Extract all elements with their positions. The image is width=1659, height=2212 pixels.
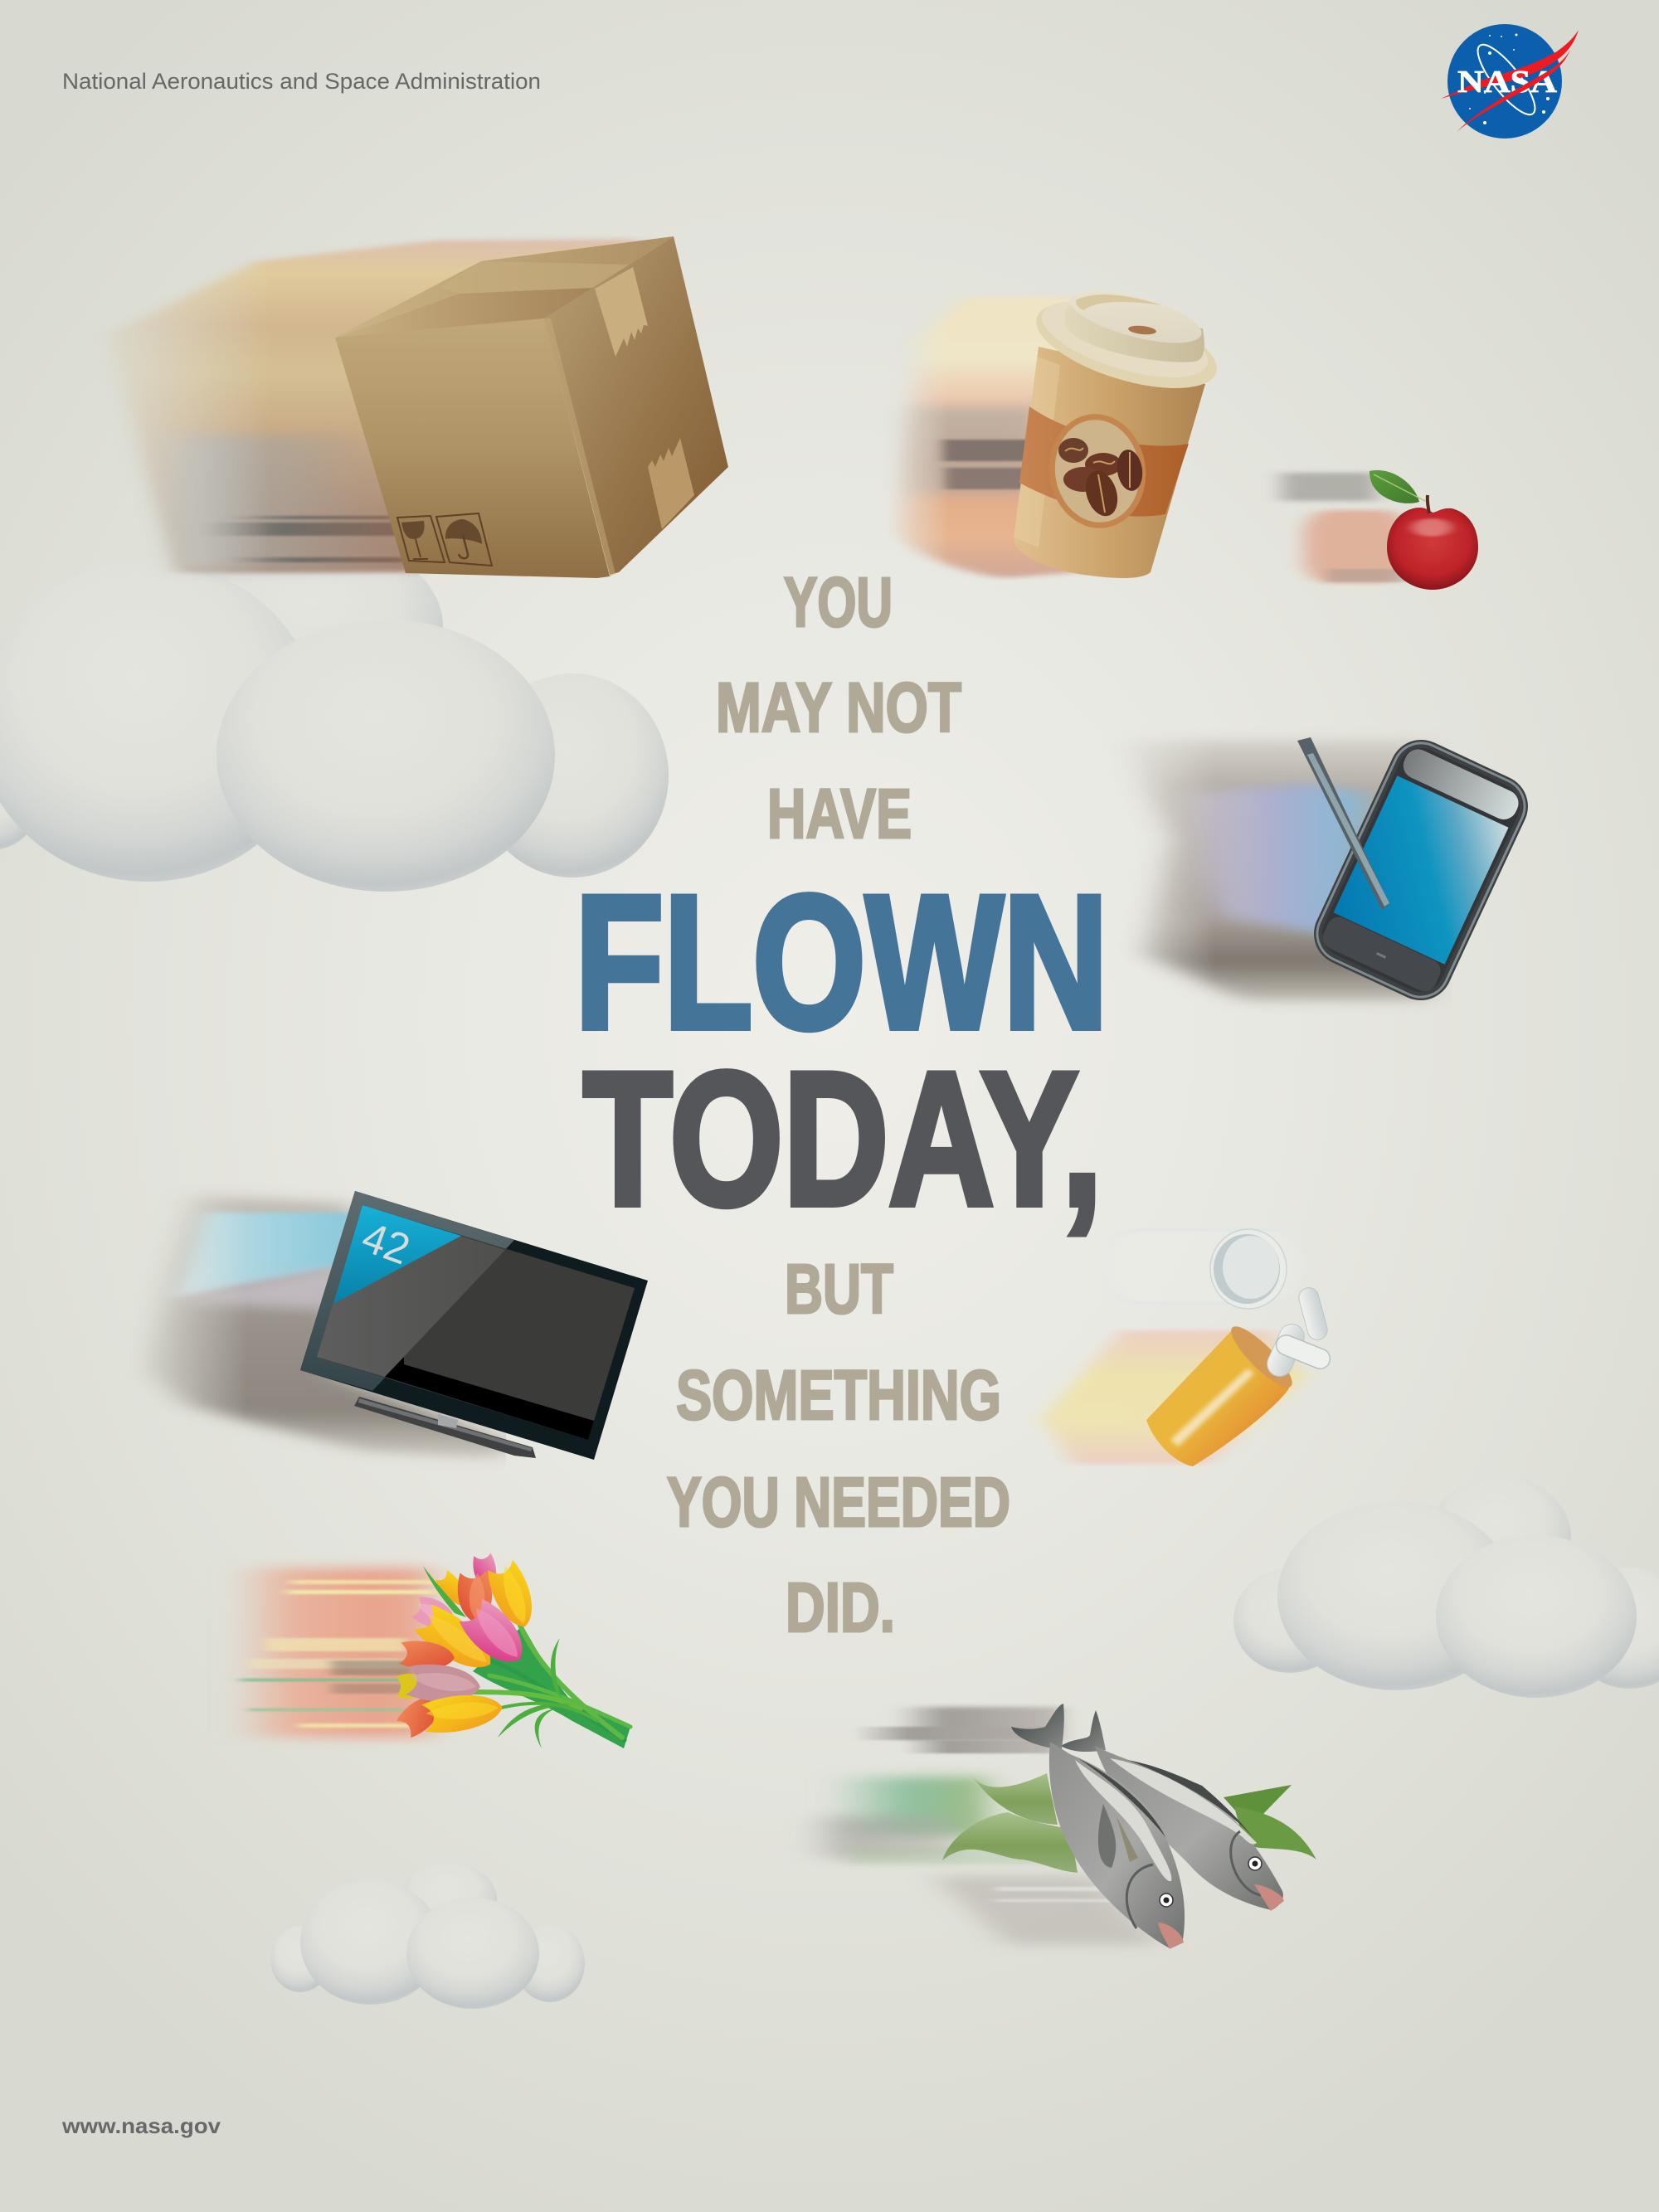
cup sleeve band xyxy=(1019,406,1189,517)
line: TODAY,: TODAY, xyxy=(583,1033,1102,1245)
NASA logo red lower streak xyxy=(1457,50,1570,132)
NASA logo red vector band xyxy=(1441,30,1579,99)
fish motion trail xyxy=(805,1707,1161,1945)
apple xyxy=(1387,508,1478,590)
line: FLOWN: FLOWN xyxy=(575,856,1108,1068)
tulip flowers xyxy=(394,1553,542,1740)
cup coffee-bean label xyxy=(1042,408,1153,534)
box tape xyxy=(595,267,648,357)
tulip bouquet with motion trail xyxy=(232,1553,630,1748)
box motion trail xyxy=(104,239,639,572)
bottle cap xyxy=(1210,1229,1287,1309)
line: SOMETHING: SOMETHING xyxy=(676,1356,1001,1434)
phone motion trail xyxy=(1116,740,1427,1001)
cloud: right xyxy=(1233,1476,1659,1698)
fish leaves xyxy=(942,1773,1316,1873)
box faces xyxy=(335,236,674,338)
cup motion trail xyxy=(892,297,1078,578)
phone stylus xyxy=(1297,737,1389,910)
line: DID.: DID. xyxy=(786,1568,895,1646)
footer: website: www.nasa.gov xyxy=(61,2113,221,2138)
tv channel number: 42 xyxy=(356,1213,416,1274)
fish on leaves with motion trail xyxy=(805,1704,1316,1949)
cap motion trail xyxy=(1106,1230,1301,1303)
coffee cup with motion trail xyxy=(892,280,1226,578)
bottle xyxy=(1146,1329,1290,1466)
tv motion trail xyxy=(137,1194,514,1460)
apple with motion trail xyxy=(1282,470,1478,590)
cloud: large upper left xyxy=(0,539,669,892)
tv screen xyxy=(317,1205,635,1440)
apple leaf xyxy=(1370,470,1419,503)
line: BUT: BUT xyxy=(785,1250,893,1328)
television with motion trail xyxy=(137,1191,648,1460)
pill bottle with motion trail xyxy=(1041,1229,1333,1466)
line: YOU: YOU xyxy=(784,563,893,641)
smartphone with motion trail xyxy=(1116,729,1538,1011)
tulip motion trail xyxy=(232,1568,440,1738)
bottle motion trail xyxy=(1041,1330,1306,1464)
fish: rear xyxy=(1061,1710,1284,1911)
phone body xyxy=(1304,729,1538,1011)
headline: you may not have flown today, but something you needed did. xyxy=(575,563,1108,1646)
apple motion trail xyxy=(1282,473,1408,583)
cloud: lower left xyxy=(270,1863,585,2009)
cup lid xyxy=(1027,280,1226,406)
line: YOU NEEDED: YOU NEEDED xyxy=(667,1463,1010,1541)
NASA logo xyxy=(1441,24,1579,139)
line: MAY NOT: MAY NOT xyxy=(716,668,961,746)
cup body xyxy=(1014,347,1205,578)
line: HAVE: HAVE xyxy=(767,775,912,853)
loose pills xyxy=(1263,1286,1333,1380)
box handling icons xyxy=(397,513,492,566)
tv frame xyxy=(300,1191,648,1460)
header: agency name: National Aeronautics and Space Administration xyxy=(62,69,541,94)
tulip leaves xyxy=(423,1566,572,1748)
NASA logo wordmark: NASA xyxy=(1457,65,1558,100)
tulip stems xyxy=(465,1621,630,1748)
fish: front xyxy=(1011,1704,1185,1949)
cardboard box with motion trail xyxy=(104,236,728,578)
tv stand xyxy=(354,1397,536,1458)
tv blue reflection xyxy=(333,1205,461,1304)
